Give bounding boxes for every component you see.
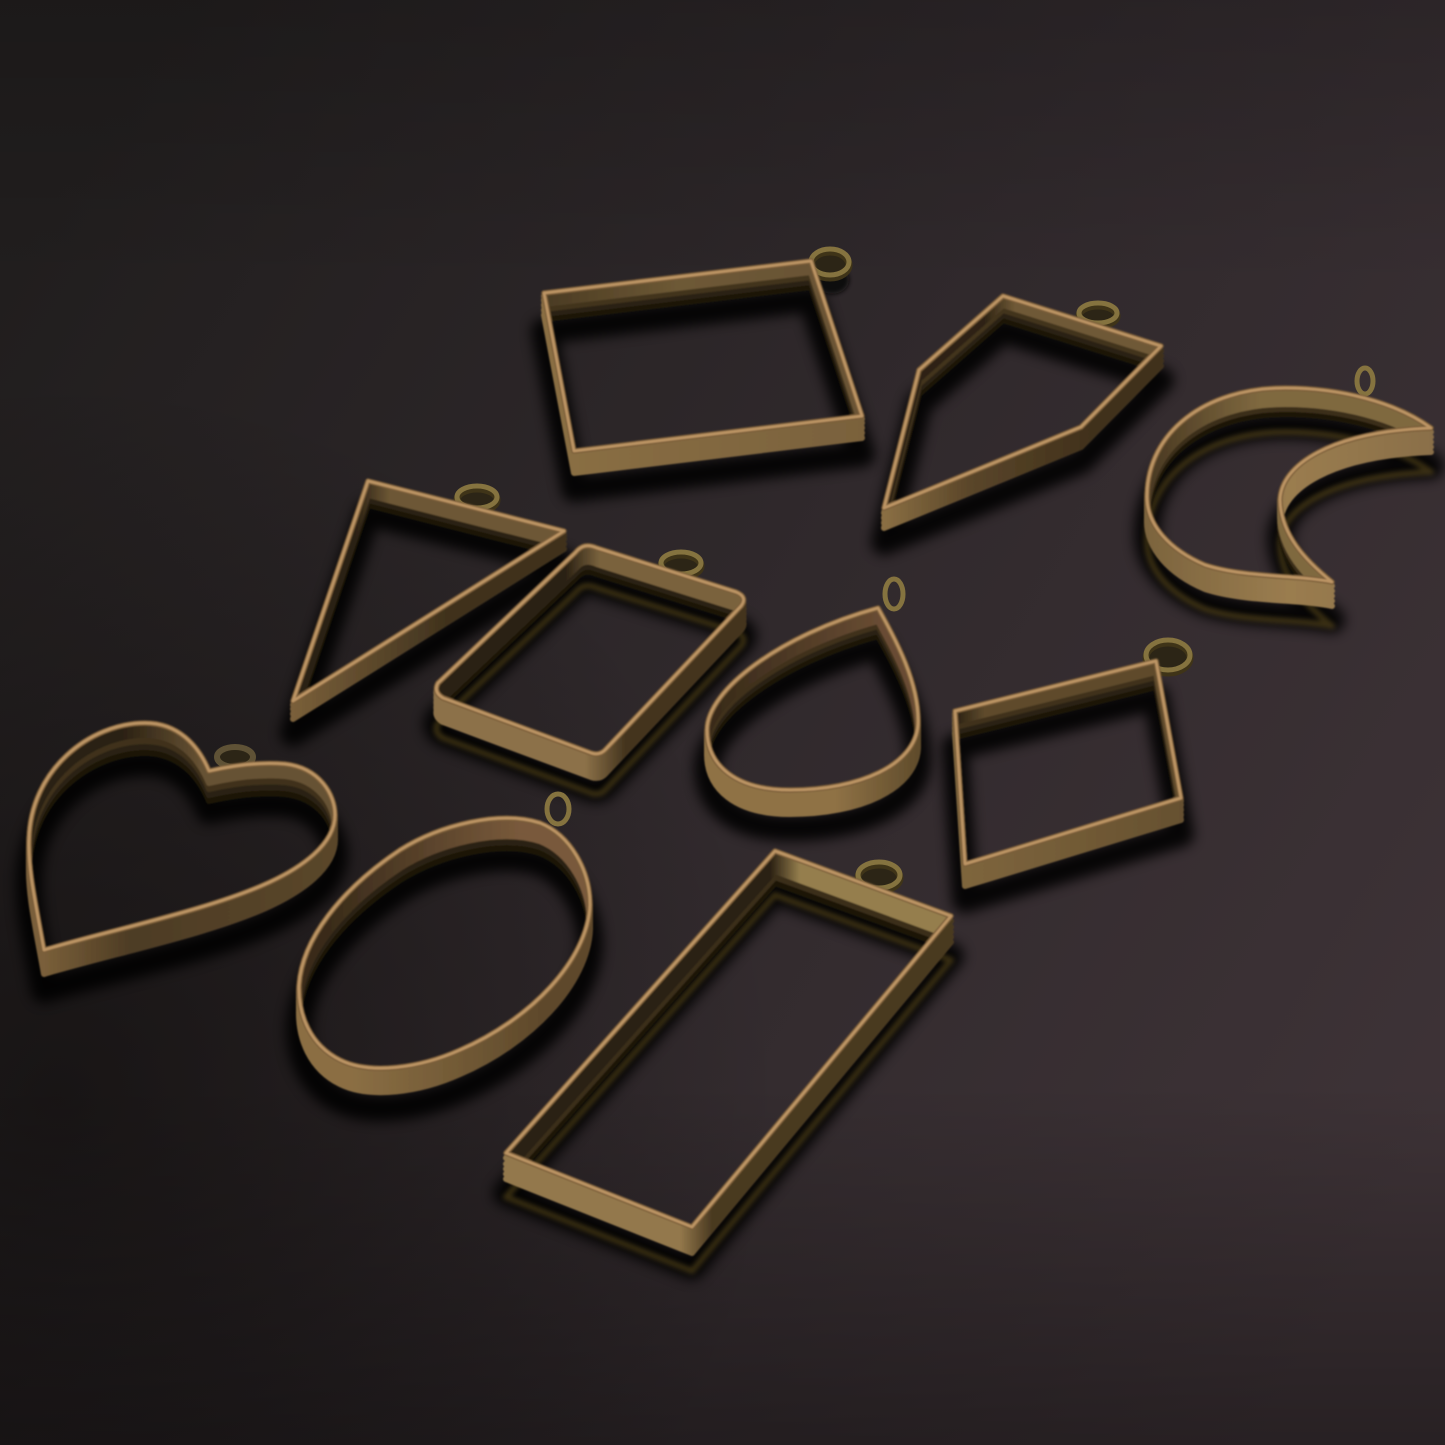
frame: wide square pendant (544, 249, 862, 489)
frame: kite pendant (884, 296, 1161, 542)
frame: teardrop pendant (707, 579, 918, 828)
frame: rectangle pendant (436, 546, 744, 794)
frame: heart pendant (29, 723, 335, 990)
frame: oval pendant (299, 794, 590, 1108)
frame: triangle pendant (293, 481, 564, 733)
frame: long rectangle pendant (506, 851, 951, 1271)
frame: crescent moon pendant (1147, 368, 1431, 626)
frame: diamond square pendant (955, 640, 1190, 900)
